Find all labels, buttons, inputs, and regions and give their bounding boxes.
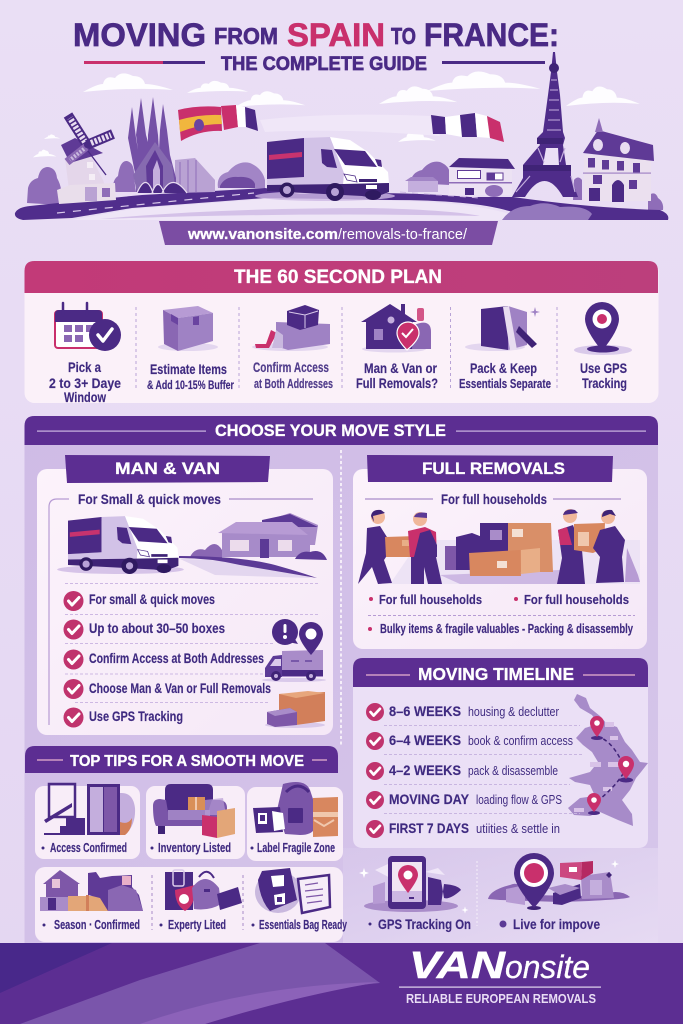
man and van illustration bbox=[57, 513, 327, 578]
move style header bbox=[24, 416, 658, 445]
checklist: Confirm Access at Both Addresses bbox=[89, 651, 264, 666]
plan step 3 text bbox=[253, 360, 333, 391]
timeline rows: utiities & settle in bbox=[476, 821, 560, 836]
mover two bbox=[408, 512, 442, 584]
road bbox=[15, 188, 668, 220]
icon: stacked boxes bbox=[265, 691, 325, 728]
plan step 6 text bbox=[580, 360, 627, 391]
panel: moving timeline bbox=[353, 658, 648, 848]
bullet list bbox=[368, 592, 635, 636]
panel: man and van: For Small & quick moves bbox=[78, 492, 221, 507]
house bbox=[179, 513, 327, 578]
icon: packing box with tape bbox=[465, 306, 540, 351]
bullet list: For full households bbox=[379, 592, 482, 607]
plan header bbox=[24, 261, 658, 293]
plan step 1 text: 2 to 3+ Daye bbox=[49, 375, 121, 391]
tip: access confirmed bbox=[35, 784, 140, 859]
illustration: movers and boxes bbox=[358, 509, 640, 584]
full removals tab: FULL REMOVALS bbox=[422, 459, 565, 478]
plan step 6 text: Tracking bbox=[582, 375, 627, 391]
checklist: Choose Man & Van or Full Removals bbox=[89, 681, 271, 696]
icon: GPS pin bbox=[574, 302, 632, 355]
panel: choose your move style bbox=[0, 416, 683, 1024]
plan step 6 text: Use GPS bbox=[580, 360, 627, 376]
map with route pins bbox=[568, 694, 648, 826]
tip: access confirmed: Access Confirmed bbox=[50, 841, 127, 855]
plan step 4 text: Full Removals? bbox=[356, 376, 438, 391]
hero illustration: Spain to France landscape bbox=[15, 52, 668, 220]
tips row 2 bbox=[35, 867, 347, 942]
icon: house with badge bbox=[361, 304, 431, 352]
timeline rows: 8–6 WEEKS bbox=[389, 703, 461, 719]
checklist: For small & quick moves bbox=[89, 592, 215, 607]
plan step 4 text bbox=[356, 361, 438, 391]
logo: RELIABLE EUROPEAN REMOVALS bbox=[406, 992, 596, 1006]
tip: experty lited bbox=[160, 870, 242, 932]
icon: calendar bbox=[55, 303, 121, 351]
timeline header bbox=[353, 658, 648, 687]
plan step 1 text bbox=[49, 359, 121, 405]
plan step 2 text bbox=[147, 362, 234, 392]
title: SPAIN bbox=[287, 17, 385, 53]
plan step 5 text bbox=[459, 361, 551, 391]
tip: season confirmed: Season ‧ Confirmed bbox=[54, 918, 140, 932]
title: FROM bbox=[214, 23, 278, 49]
plan step 1 text: Window bbox=[64, 389, 106, 405]
French flag bbox=[431, 113, 504, 142]
timeline rows: FIRST 7 DAYS bbox=[389, 820, 469, 836]
windmill bbox=[57, 115, 116, 204]
top tips header bbox=[25, 746, 338, 773]
Sagrada Familia bbox=[128, 97, 215, 193]
URL banner: www.vanonsite.com bbox=[187, 226, 338, 243]
GPS tracking on feature: GPS Tracking On bbox=[378, 917, 471, 932]
panel: man and van bbox=[37, 455, 333, 735]
bullet list: For full households bbox=[524, 592, 629, 607]
mover three bbox=[557, 509, 585, 584]
panel: full removals bbox=[353, 455, 647, 649]
GPS tracking on feature bbox=[359, 856, 471, 932]
live tracking feature with pin and boxes bbox=[488, 853, 630, 932]
french house bbox=[449, 158, 515, 197]
plan step 3 text: Confirm Access bbox=[253, 360, 329, 375]
tip: season confirmed bbox=[40, 870, 143, 932]
parisian building bbox=[583, 118, 654, 202]
Spanish flag bbox=[178, 105, 258, 141]
title bbox=[73, 17, 559, 53]
background trees bbox=[27, 161, 663, 210]
carried box left bbox=[385, 536, 417, 557]
plan step 5 text: Pack & Keep bbox=[470, 361, 537, 376]
boxes pile bbox=[445, 523, 553, 576]
logo: onsite bbox=[505, 949, 590, 985]
panel: top tips bbox=[25, 746, 347, 942]
plan step 5 text: Essentials Separate bbox=[459, 376, 551, 391]
checklist: Up to about 30–50 boxes bbox=[89, 621, 225, 636]
timeline rows: MOVING DAY bbox=[389, 791, 470, 807]
timeline rows: housing & declutter bbox=[468, 704, 560, 719]
URL banner: /removals-to-france/ bbox=[338, 226, 468, 243]
panel: full removals: For full households bbox=[441, 492, 547, 507]
timeline header: MOVING TIMELINE bbox=[418, 664, 574, 684]
timeline rows: 6–4 WEEKS bbox=[389, 732, 461, 748]
tip: essentials bag ready bbox=[252, 868, 347, 932]
timeline rows: 4–2 WEEKS bbox=[389, 762, 461, 778]
man and van tab bbox=[65, 455, 270, 483]
title: TO bbox=[391, 23, 416, 49]
tip: inventory listed bbox=[146, 784, 245, 859]
plan step 2 text: & Add 10-15% Buffer bbox=[147, 378, 234, 392]
live tracking feature with pin and boxes: Live for impove bbox=[513, 917, 600, 932]
tip: label fragile zone: Label Fragile Zone bbox=[257, 841, 335, 855]
plan step 1 text: Pick a bbox=[68, 359, 101, 375]
timeline rows: pack & disassemble bbox=[468, 763, 558, 778]
tip: essentials bag ready: Essentials Bag Ready bbox=[259, 918, 347, 932]
timeline rows bbox=[366, 703, 573, 838]
title: MOVING bbox=[73, 17, 206, 53]
panel: the 60 second plan bbox=[24, 261, 658, 405]
timeline rows: loading flow & GPS bbox=[476, 792, 562, 807]
delivery van bbox=[255, 137, 395, 201]
footer band bbox=[0, 943, 683, 1024]
title: FRANCE: bbox=[424, 17, 559, 53]
icon: cardboard box bbox=[158, 306, 218, 351]
URL banner bbox=[159, 221, 498, 245]
plan step 2 text: Estimate Items bbox=[150, 362, 227, 377]
top tips header: TOP TIPS FOR A SMOOTH MOVE bbox=[70, 753, 304, 770]
plan step 3 text: at Both Addresses bbox=[254, 376, 333, 391]
tip: experty lited: Experty Lited bbox=[168, 918, 226, 932]
icon: stacked boxes at access bbox=[252, 305, 330, 351]
mover one bbox=[358, 510, 392, 584]
checklist bbox=[64, 591, 271, 728]
man and van tab: MAN & VAN bbox=[115, 459, 220, 478]
tip: inventory listed: Inventory Listed bbox=[158, 841, 231, 855]
full removals tab bbox=[367, 455, 613, 482]
logo bbox=[399, 945, 601, 1006]
move style header: CHOOSE YOUR MOVE STYLE bbox=[215, 421, 446, 440]
subtitle: THE COMPLETE GUIDE bbox=[221, 53, 427, 75]
plan step 4 text: Man & Van or bbox=[364, 361, 438, 376]
icon: alert and pin with small van bbox=[262, 619, 326, 682]
timeline rows: book & confirm access bbox=[468, 733, 573, 748]
mover four bbox=[593, 510, 640, 583]
checklist: Use GPS Tracking bbox=[89, 709, 183, 724]
subtitle bbox=[84, 53, 545, 75]
Eiffel tower bbox=[512, 52, 578, 197]
plan header: THE 60 SECOND PLAN bbox=[234, 267, 442, 288]
sky clouds bbox=[33, 72, 640, 157]
logo: VAN bbox=[409, 945, 507, 987]
tip: label fragile zone bbox=[247, 782, 343, 861]
carried box right bbox=[574, 523, 605, 553]
small distant house bbox=[405, 177, 438, 192]
